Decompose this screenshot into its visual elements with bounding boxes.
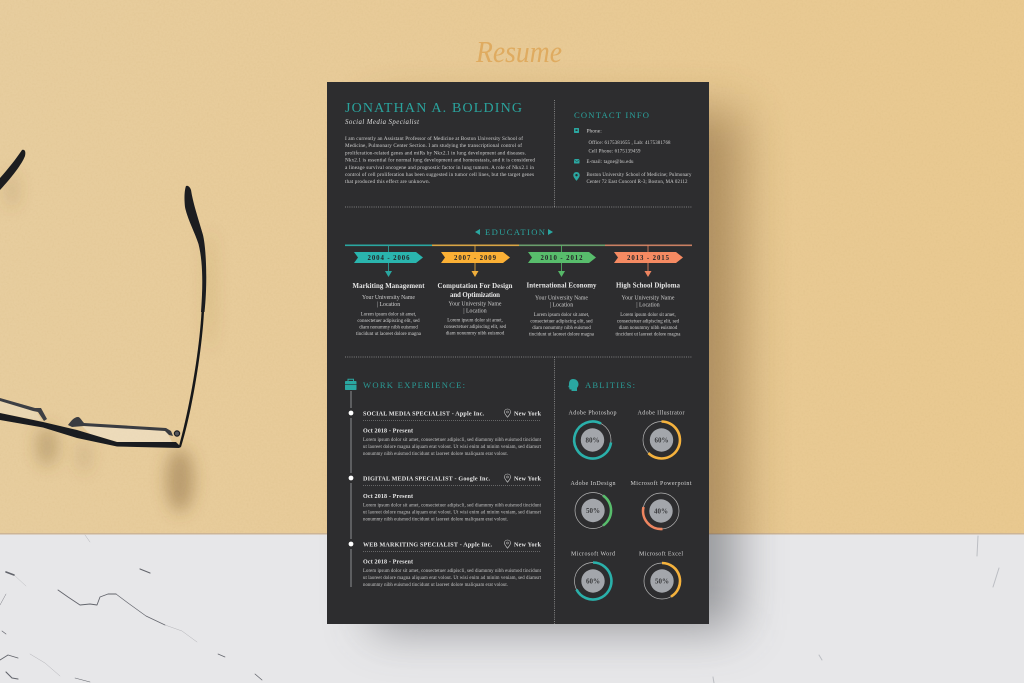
timeline item 2004-2006: Lorem ipsum dolor sit amet,	[361, 312, 416, 318]
job 3: Oct 2018 - Present	[363, 560, 413, 566]
panel: contact info	[573, 110, 692, 185]
timeline line and dots	[349, 391, 353, 587]
timeline item 2013-2015: Your University Name	[622, 296, 675, 302]
job 1: ut laoreet dolore magna aliquam erat volout. Ut wisi enim ad minim veniam, sed diamsrt	[363, 445, 542, 450]
background: beige paper	[0, 0, 1024, 534]
donut: Adobe InDesign 50%	[570, 481, 616, 528]
timeline item 2007-2009: diam nonummy nibh euismod	[446, 332, 505, 337]
timeline item 2004-2006: Markiting Management	[352, 283, 425, 290]
job 2: nonummy nibh euismod tincidunt ut laoreet dolore maliquam erat volout.	[363, 518, 508, 522]
timeline item 2007-2009: and Optimization	[450, 292, 500, 299]
background: marble surface	[0, 534, 1024, 683]
panel: work experience	[345, 379, 542, 588]
timeline item 2010-2012: | Location	[550, 302, 573, 308]
donut: Microsoft Powerpoint 40%: 40%	[654, 508, 668, 516]
panel: abilities	[568, 379, 692, 600]
heading: name: JONATHAN A. BOLDING	[345, 101, 522, 116]
job 2: New York	[514, 476, 542, 482]
heading: work experience: WORK EXPERIENCE:	[363, 380, 465, 390]
donut: Adobe Illustrator 60%: 60%	[654, 436, 668, 444]
text block: summary	[345, 135, 535, 185]
timeline item 2013-2015: | Location	[636, 302, 660, 308]
job 2: DIGITAL MEDIA SPECIALIST - Google Inc.	[363, 476, 490, 482]
heading: abilities: ABLITIES:	[585, 380, 635, 390]
job 1: nonummy nibh euismod tincidunt ut laoreet dolore maliquam erat volout.	[363, 452, 508, 457]
timeline item 2007-2009: | Location	[463, 308, 487, 314]
job 3: New York	[514, 542, 542, 548]
donut: Microsoft Powerpoint 40%	[630, 480, 692, 529]
panel: education	[345, 227, 692, 338]
job 2: ut laoreet dolore magna aliquam erat volout. Ut wisi enim ad minim veniam, sed diamsrt	[363, 510, 542, 516]
timeline item 2010-2012: diam nonummy nibh euismod	[532, 326, 591, 331]
heading: education: EDUCATION	[485, 227, 546, 237]
job 2	[363, 474, 542, 522]
timeline item 2007-2009: Your University Name	[448, 302, 502, 308]
job 3: Lorem ipsum dolor sit amet, consectetuer adipiscli, sed diamnmy nibh euismod tincidunt	[363, 569, 542, 574]
job 3	[363, 540, 542, 588]
contact details	[586, 128, 692, 185]
timeline item 2010-2012: International Economy	[526, 282, 597, 290]
timeline item 2004-2006	[352, 245, 425, 337]
donut: Adobe InDesign 50%: 50%	[586, 507, 600, 515]
title: Resume script: Resume	[475, 34, 562, 69]
job 2: Lorem ipsum dolor sit amet, consectetuer adipiscli, sed diamnmy nibh euismod tincidunt	[363, 504, 542, 508]
donut: Microsoft Word 60%: 60%	[586, 578, 600, 586]
icon: head	[568, 379, 578, 391]
glasses shadow	[7, 172, 214, 512]
timeline item 2010-2012: tincidunt ut laoreet dolore magna	[529, 332, 595, 338]
lens left	[0, 401, 42, 421]
contact details: Phone:	[586, 128, 602, 134]
contact details: Boston University School of Medicine; Pulmonary	[586, 173, 692, 178]
text block: summary: control of cell proliferation has been suggested in tumor cell lines, but the target genes	[345, 171, 534, 178]
rim	[0, 398, 47, 421]
subtitle: Social Media Specialist	[345, 119, 420, 126]
icon: mail	[574, 159, 580, 164]
timeline item 2004-2006: tincidunt ut laoreet dolore magna	[356, 332, 422, 337]
eyeglasses	[0, 150, 214, 512]
timeline item 2007-2009: consectetuer adipiscing elit, sed	[444, 325, 507, 330]
icon: location pin	[573, 172, 580, 181]
timeline bar	[345, 244, 692, 246]
job 3: nonummy nibh euismod tincidunt ut laoreet dolore maliquam erat volout.	[363, 583, 508, 588]
text block: summary: that produced this effect are unknown.	[345, 178, 430, 185]
timeline item 2007-2009: Lorem ipsum dolor sit amet,	[447, 318, 503, 324]
icon: phone	[574, 128, 579, 133]
contact details: Office: 6175381655 , Lab: 4175381768	[588, 141, 671, 146]
timeline item 2004-2006: 2004 - 2006	[368, 255, 410, 262]
timeline item 2007-2009: Computation For Design	[438, 283, 513, 290]
job 3: WEB MARKITING SPECIALIST - Apple Inc.	[363, 542, 492, 548]
timeline item 2010-2012: Lorem ipsum dolor sit amet,	[534, 313, 589, 318]
donut: Adobe Photoshop 80%: Adobe Photoshop	[568, 410, 616, 416]
job 2: Oct 2018 - Present	[363, 494, 413, 500]
timeline item 2013-2015: diam nonummy nibh euismod	[619, 326, 678, 331]
donut: Adobe Photoshop 80%	[568, 410, 616, 459]
contact details: Center 72 East Concord R-3; Boston, MA 02112	[586, 180, 688, 185]
text block: summary: I am currently an Assistant Professor of Medicine at Boston University School of	[345, 135, 523, 142]
job 1: Oct 2018 - Present	[363, 428, 413, 434]
donut: Adobe Photoshop 80%: 80%	[586, 436, 600, 444]
right temple	[184, 186, 206, 312]
text block: summary: Nkx2.1 is essential for normal lung development and homeostasis, and it is considered	[345, 156, 535, 164]
card shadow	[372, 110, 742, 630]
icon: briefcase	[345, 379, 356, 390]
heading: contact info: CONTACT INFO	[574, 110, 649, 120]
timeline item 2004-2006: diam nonummy nibh euismod	[359, 325, 418, 330]
timeline item 2004-2006: consectetuer adipiscing elit, sed	[357, 319, 420, 324]
timeline item 2013-2015: 2013 - 2015	[627, 255, 670, 262]
resume card	[327, 82, 709, 624]
donut: Adobe Illustrator 60%: Adobe Illustrator	[638, 410, 684, 416]
job 1	[363, 409, 542, 457]
left temple tip	[0, 150, 25, 190]
donut: Microsoft Word 60%	[571, 550, 615, 600]
text block: summary: proliferation-related genes and miRs by Nkx2.1 in lung development and diseases.	[345, 149, 526, 156]
timeline item 2007-2009	[438, 245, 513, 337]
lens right	[82, 426, 172, 442]
timeline item 2013-2015	[614, 245, 683, 338]
timeline item 2010-2012: consectetuer adipiscing elit, sed	[530, 320, 593, 324]
donut: Microsoft Powerpoint 40%: Microsoft Powerpoint	[630, 480, 692, 487]
timeline item 2004-2006: Your University Name	[362, 295, 415, 301]
job 1: Lorem ipsum dolor sit amet, consectetuer adipiscli, sed diamnmy nibh euismod tincidunt	[363, 438, 542, 443]
contact details: Cell Phone: 6175139459	[588, 150, 641, 154]
job 3: ut laoreet dolore magna aliquam erat volout. Ut wisi enim ad minim veniam, sed diamsrt	[363, 576, 542, 581]
job 1: SOCIAL MEDIA SPECIALIST - Apple Inc.	[363, 412, 484, 418]
timeline item 2013-2015: Lorem ipsum dolor sit amet,	[620, 313, 676, 318]
text block: summary: a lineage survival oncogene and prognostic factor in lung tumors. A role of Nkx2.1 in	[345, 164, 534, 171]
timeline item 2004-2006: | Location	[377, 302, 400, 308]
timeline item 2010-2012: Your University Name	[535, 296, 588, 302]
donut: Microsoft Excel 50%: 50%	[655, 578, 669, 586]
timeline item 2013-2015: High School Diploma	[616, 282, 681, 290]
text block: summary: Medicine, Pulmonary Center Section. I am studying the transcriptional control of	[345, 142, 522, 149]
timeline item 2013-2015: tincidunt ut laoreet dolore magna	[616, 332, 681, 338]
timeline item 2010-2012	[526, 245, 597, 338]
contact details: E-mail: tagne@bu.edu	[586, 160, 634, 165]
job 1: New York	[514, 412, 542, 418]
donut: Microsoft Word 60%: Microsoft Word	[571, 550, 615, 558]
timeline item 2013-2015: consectetuer adipiscing elit, sed	[617, 320, 680, 324]
donut: Microsoft Excel 50%	[639, 550, 683, 599]
timeline item 2007-2009: 2007 - 2009	[454, 255, 497, 262]
donut: Microsoft Excel 50%: Microsoft Excel	[639, 550, 683, 558]
donut: Adobe InDesign 50%: Adobe InDesign	[570, 481, 616, 487]
donut: Adobe Illustrator 60%	[638, 410, 684, 458]
timeline item 2010-2012: 2010 - 2012	[540, 255, 583, 262]
